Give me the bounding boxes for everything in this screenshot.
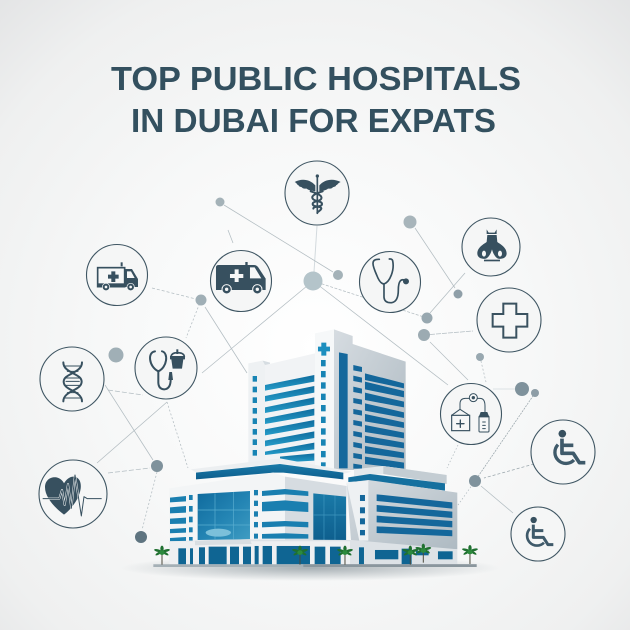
icon: ambulance outline — [86, 244, 148, 306]
title: TOP PUBLIC HOSPITALS — [111, 60, 521, 97]
ground floor — [153, 539, 477, 567]
icon: caduceus — [285, 161, 349, 225]
icon: wheelchair small — [511, 507, 565, 561]
icon: DNA helix — [40, 347, 104, 411]
left lower block — [169, 458, 352, 542]
hospital building — [153, 329, 478, 567]
palm trees — [154, 544, 478, 565]
title: IN DUBAI FOR EXPATS — [131, 102, 496, 139]
icon: medical kit and drip — [440, 384, 502, 444]
icon: ambulance solid — [210, 250, 272, 312]
network connector lines — [97, 205, 535, 530]
ground shadow — [120, 555, 500, 581]
tower — [248, 329, 406, 470]
network nodes — [108, 198, 539, 543]
icon: kidneys — [462, 218, 520, 276]
icon: heart with ECG — [39, 460, 107, 528]
icon: stethoscope large — [360, 252, 420, 312]
icon: medical cross — [477, 288, 541, 352]
title — [111, 60, 521, 139]
icon: wheelchair large — [531, 420, 595, 484]
right lower block — [347, 466, 457, 549]
icon: stethoscope and bag — [135, 337, 197, 399]
